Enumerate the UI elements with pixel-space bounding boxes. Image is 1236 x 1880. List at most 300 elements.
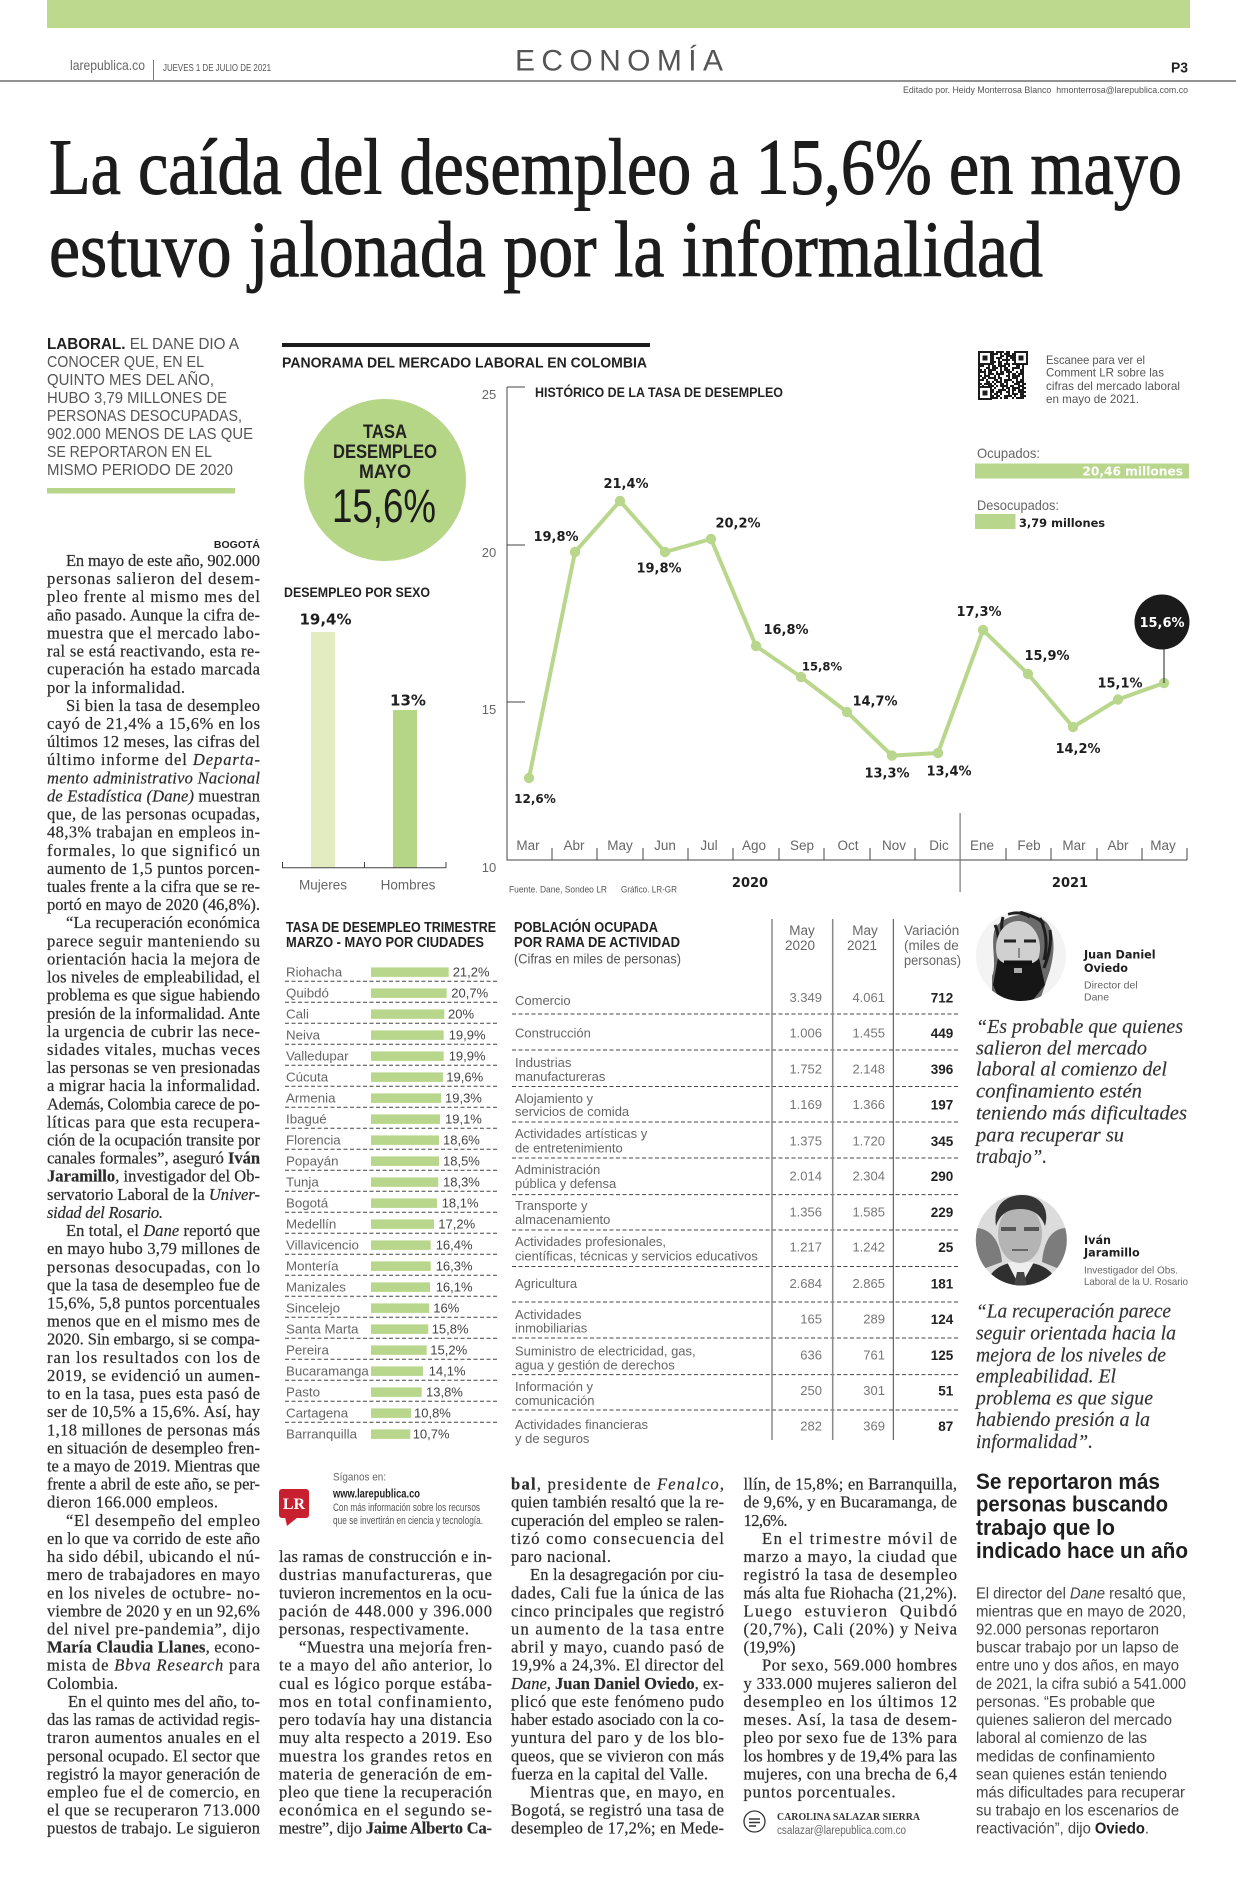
article column 1: En total, el Dane reportó que xyxy=(66,1221,260,1240)
city names: Neiva xyxy=(286,1027,321,1042)
chart heading xyxy=(286,920,496,951)
may 2021 values: 4.061 xyxy=(852,990,885,1005)
deck: intro summary: PERSONAS DESOCUPADAS, xyxy=(47,408,242,425)
article column 1: en mayo hubo 3,79 millones de xyxy=(47,1239,260,1258)
QR caption: cifras del mercado laboral xyxy=(1046,379,1180,393)
variation values: 197 xyxy=(931,1098,953,1113)
month labels: Feb xyxy=(1017,838,1041,853)
article column 1: Si bien la tasa de desempleo xyxy=(66,696,260,715)
article column 2: pleo que tiene la recuperación xyxy=(279,1782,492,1802)
article column 4: y 333.000 mujeres salieron del xyxy=(744,1674,957,1693)
article column 2: te a mayo del año anterior, lo xyxy=(279,1656,492,1675)
city values: 15,2% xyxy=(430,1342,468,1358)
article column 1: sidades vitales, muchas veces xyxy=(47,1040,260,1059)
variation values: 290 xyxy=(931,1169,953,1184)
article column 3: quien también resaltó que la re- xyxy=(511,1493,724,1512)
article column 5: quienes salieron del mercado xyxy=(976,1712,1172,1729)
article column 4: (20,7%), Cali (20%) y Neiva xyxy=(744,1620,958,1638)
article column 1: te a mayo de 2019. Mientras que xyxy=(47,1456,260,1476)
data labels: 13,3% xyxy=(864,766,910,782)
may 2021 values: 761 xyxy=(863,1348,885,1362)
table heading: POBLACIÓN OCUPADA xyxy=(514,918,658,936)
row names: de entretenimiento xyxy=(515,1140,623,1156)
deck: intro summary: CONOCER QUE, EN EL xyxy=(47,354,204,371)
subheading: se reportaron más personas: Se reportaron más xyxy=(976,1469,1160,1494)
row names: Agricultura xyxy=(515,1276,578,1291)
city values: 16% xyxy=(433,1300,460,1316)
article column 3: tizó como consecuencia del xyxy=(511,1529,724,1548)
QR caption: Comment LR sobre las xyxy=(1046,366,1164,380)
quote: Oviedo: “Es probable que quienes xyxy=(976,1016,1183,1038)
variation values: 229 xyxy=(931,1205,953,1220)
article column 1: últimos 12 meses, las cifras del xyxy=(47,732,260,751)
headline xyxy=(49,124,1182,294)
article column 1: “El desempeño del empleo xyxy=(66,1511,260,1530)
article column 1: personas desocupadas, con lo xyxy=(47,1257,260,1276)
y axis: 15 xyxy=(482,702,496,717)
city values: 21,2% xyxy=(453,964,490,980)
may 2020 values: 282 xyxy=(800,1418,822,1433)
masthead: P3 xyxy=(1171,60,1188,77)
article column 1: canales formales”, aseguró Iván xyxy=(47,1149,260,1168)
month labels: Mar xyxy=(516,838,540,853)
quote: Oviedo: teniendo más dificultades xyxy=(976,1102,1187,1124)
may 2021 values: 2.148 xyxy=(852,1062,885,1076)
row names: inmobiliarias xyxy=(515,1320,588,1336)
byline: CAROLINA SALAZAR SIERRA xyxy=(777,1811,920,1823)
data labels: 19,8% xyxy=(636,562,682,576)
may 2020 values: 1.006 xyxy=(789,1026,822,1040)
article column 1: formales, lo que significó un xyxy=(47,841,260,860)
chart heading: TASA DE DESEMPLEO TRIMESTRE xyxy=(286,920,496,936)
article column 3: 19,9% a 24,3%. El director del xyxy=(511,1656,724,1675)
callout: latest value 15,6% xyxy=(1134,594,1190,683)
portrait: Iván Jaramillo xyxy=(975,1194,1067,1290)
article column 3: desempleo de 17,2%; en Mede- xyxy=(511,1819,724,1838)
may 2021 values: 2.865 xyxy=(852,1276,885,1291)
subheading: se reportaron más personas: personas buscando xyxy=(976,1492,1168,1516)
bars xyxy=(371,967,449,1439)
y axis: 25 xyxy=(482,387,496,402)
y axis xyxy=(482,387,1187,892)
bar chart: desempleo por sexo xyxy=(282,585,446,892)
city values: 18,1% xyxy=(442,1196,479,1210)
row names: Información y xyxy=(515,1379,594,1394)
city names: Popayán xyxy=(286,1153,338,1168)
byline: csalazar@larepublica.com.co xyxy=(777,1825,906,1837)
may 2021 values: 301 xyxy=(863,1383,885,1398)
quote: Jaramillo: “La recuperación parece xyxy=(976,1301,1171,1323)
data labels: 17,3% xyxy=(956,605,1002,620)
may 2020 values: 1.217 xyxy=(789,1240,822,1254)
article column 1: las personas se ven presionadas xyxy=(47,1058,260,1077)
table heading xyxy=(514,918,681,966)
person caption: Jaramillo: Laboral de la U. Rosario xyxy=(1084,1276,1188,1288)
article column 1: servatorio Laboral de la Univer- xyxy=(47,1185,260,1204)
variation values: 396 xyxy=(931,1062,954,1077)
article column 3: cuperación del empleo se ralen- xyxy=(511,1511,724,1530)
column headers: Variación xyxy=(904,923,959,938)
article column 5: entre uno y dos años, en mayo xyxy=(976,1658,1179,1675)
quote: Jaramillo: mejora de los niveles de xyxy=(976,1344,1166,1366)
promo: síganos en larepublica.co: www.larepublica.co xyxy=(332,1486,420,1500)
variation values xyxy=(931,991,954,1434)
article column 5: reactivación”, dijo Oviedo. xyxy=(976,1821,1149,1838)
article column 4: 12,6%. xyxy=(744,1511,788,1530)
article column 1: ral se está reactivando, esta re- xyxy=(47,642,260,661)
article column 1: menos que en el mismo mes de xyxy=(47,1312,260,1331)
month labels: Jul xyxy=(700,838,718,853)
panel: panorama del mercado laboral xyxy=(282,343,1190,896)
article column 1: Colombia. xyxy=(47,1674,118,1693)
data labels: 15,9% xyxy=(1024,649,1070,664)
row names: Actividades financieras xyxy=(515,1417,648,1432)
row names: Actividades artísticas y xyxy=(515,1126,648,1141)
article column 4: mujeres, con una brecha de 6,4 xyxy=(744,1764,957,1783)
article column 1: muestra que el mercado labo- xyxy=(47,623,260,642)
article column 1: sidad del Rosario. xyxy=(47,1203,163,1222)
article column 1: 48,3% trabajan en empleos in- xyxy=(47,823,260,842)
city names: Cartagena xyxy=(286,1405,349,1420)
month labels xyxy=(516,838,1176,853)
article column 1: pleo frente al mismo mes del xyxy=(47,587,260,606)
article column 1: ción de la ocupación transite por xyxy=(47,1130,260,1150)
article column 1: cayó de 21,4% a 15,6% en los xyxy=(47,714,260,733)
article column 3: un aumento de la tasa entre xyxy=(511,1620,724,1638)
article column 1: la urgencia de cubrir las nece- xyxy=(47,1022,260,1041)
article column 1: En mayo de este año, 902.000 xyxy=(66,551,260,570)
quote: Oviedo: laboral al comienzo del xyxy=(976,1058,1167,1080)
variation values: 51 xyxy=(938,1384,954,1399)
article column 1: en situación de desempleo fren- xyxy=(47,1438,260,1457)
city names: Pereira xyxy=(286,1342,329,1357)
dateline: BOGOTÁ xyxy=(214,538,260,551)
person caption: Oviedo xyxy=(1083,948,1156,1004)
row names: científicas, técnicas y servicios educativos xyxy=(515,1248,758,1264)
bar chart: desempleo por sexo: 19,4% xyxy=(299,610,352,628)
article column 1: dieron 166.000 empleos. xyxy=(47,1493,218,1512)
city values: 16,3% xyxy=(436,1258,473,1274)
column headers: (miles de xyxy=(904,938,959,953)
article column 4: registró la tasa de desempleo xyxy=(744,1565,957,1584)
article column 4: puntos porcentuales. xyxy=(744,1782,896,1802)
stat: desocupados xyxy=(975,497,1105,530)
city names: Florencia xyxy=(286,1132,341,1147)
deck: intro summary: HUBO 3,79 MILLONES DE xyxy=(47,390,227,407)
data labels: 20,2% xyxy=(715,516,761,532)
bar chart: desempleo por sexo: Hombres xyxy=(381,878,436,892)
article column 1: Jaramillo, investigador del Ob- xyxy=(47,1167,260,1186)
may 2020 values: 250 xyxy=(800,1383,822,1398)
table heading: (Cifras en miles de personas) xyxy=(514,952,681,966)
line chart: histórico de la tasa de desempleo xyxy=(482,385,1190,896)
article column 1: registró la mayor generación de xyxy=(47,1764,260,1783)
data labels: 14,2% xyxy=(1055,742,1101,757)
bar chart: desempleo por sexo: 13% xyxy=(390,692,426,710)
city names: Medellín xyxy=(286,1216,336,1231)
city names: Barranquilla xyxy=(286,1426,358,1441)
QR caption xyxy=(1046,353,1180,406)
top green band xyxy=(47,0,1190,28)
column headers: May xyxy=(789,923,815,938)
article column 5: El director del Dane resaltó que, xyxy=(976,1585,1186,1602)
year labels: 2020 xyxy=(732,876,768,891)
city names: Valledupar xyxy=(286,1048,349,1063)
quote: Jaramillo: seguir orientada hacia la xyxy=(976,1322,1176,1344)
article column 2: pero todavía hay una distancia xyxy=(279,1710,493,1729)
article column 4: los hombres y de 19,4% para las xyxy=(744,1746,957,1765)
panel title: PANORAMA DEL MERCADO LABORAL EN COLOMBIA xyxy=(282,356,648,372)
article column 3: Mientras que, en mayo, en xyxy=(530,1782,724,1802)
may 2021 values: 1.455 xyxy=(852,1026,885,1040)
article column 1: portó en mayo de 2020 (46,8%). xyxy=(47,895,260,914)
article column 1: en lo que va corrido de este año xyxy=(47,1529,260,1548)
subheading: se reportaron más personas xyxy=(976,1469,1188,1563)
article column 1: de Estadística (Dane) muestran xyxy=(47,786,260,805)
article column 4: pleo por sexo fue de 13% para xyxy=(744,1728,958,1747)
article column 1: viembre de 2020 y en un 92,6% xyxy=(47,1601,260,1620)
article column 4: (19,9%) xyxy=(744,1638,796,1657)
article column 5: 92.000 personas reportaron xyxy=(976,1622,1159,1638)
data line xyxy=(524,496,1169,783)
article column 1: empleo fue el de comercio, en xyxy=(47,1782,260,1802)
data labels xyxy=(514,477,1143,806)
subheading: se reportaron más personas: trabajo que lo xyxy=(976,1515,1115,1540)
may 2021 values: 1.242 xyxy=(852,1240,885,1254)
row names: Actividades xyxy=(515,1307,582,1322)
masthead: Editado por. Heidy Monterrosa Blanco hmonterrosa@larepublica.com.co xyxy=(903,85,1188,96)
article column 3: En la desagregación por ciu- xyxy=(530,1565,724,1584)
article column 1: das las ramas de actividad regis- xyxy=(47,1710,260,1729)
variation values: 25 xyxy=(938,1240,954,1255)
article column 2: materia de generación de em- xyxy=(279,1764,492,1783)
article column 1: por la informalidad. xyxy=(47,678,185,697)
row names: manufactureras xyxy=(515,1069,606,1084)
promo: síganos en larepublica.co: Síganos en: xyxy=(333,1472,386,1484)
row names: y de seguros xyxy=(515,1431,590,1446)
may 2021 values: 1.366 xyxy=(852,1097,885,1112)
article column 1: tuales frente a la cifra que se re- xyxy=(47,877,260,896)
article column 1: parece seguir manteniendo su xyxy=(47,931,260,950)
masthead xyxy=(0,45,1236,96)
month labels: Abr xyxy=(1107,838,1129,853)
person caption: Jaramillo: Iván xyxy=(1084,1234,1111,1247)
row names xyxy=(515,993,758,1446)
article column 4 xyxy=(744,1475,958,1802)
city values: 18,5% xyxy=(443,1154,480,1168)
chart heading: MARZO - MAYO POR CIUDADES xyxy=(286,935,484,951)
may 2021 values: 369 xyxy=(863,1418,885,1433)
row names: almacenamiento xyxy=(515,1212,610,1227)
bar chart: desempleo por sexo: Mujeres xyxy=(299,878,347,892)
city names: Tunja xyxy=(286,1174,319,1189)
city values: 14,1% xyxy=(429,1364,466,1378)
variation values: 712 xyxy=(931,991,953,1006)
article column 3: yuntura del paro y de los blo- xyxy=(511,1728,724,1747)
article column 4: Por sexo, 569.000 hombres xyxy=(762,1656,957,1675)
article column 1: puestos de trabajo. Le siguieron xyxy=(47,1819,260,1838)
article column 1: to en la tasa, pues esta pasó de xyxy=(47,1384,260,1403)
variation values: 125 xyxy=(931,1348,954,1363)
row names: comunicación xyxy=(515,1393,594,1408)
person caption: Oviedo: Dane xyxy=(1084,992,1109,1004)
promo: síganos en larepublica.co: que se invertirán en ciencia y tecnología. xyxy=(333,1515,483,1527)
person caption: Jaramillo: Investigador del Obs. xyxy=(1084,1264,1178,1276)
deck: intro summary: LABORAL. EL DANE DIO A xyxy=(47,336,240,353)
quote: Jaramillo: empleabilidad. El xyxy=(976,1366,1116,1388)
column headers: 2020 xyxy=(785,938,815,953)
article column 4: más alta fue Riohacha (21,2%). xyxy=(744,1583,957,1602)
article column 1 xyxy=(47,551,261,1838)
article column 4: Luego estuvieron Quibdó xyxy=(744,1601,957,1620)
article column 2: las ramas de construcción e in- xyxy=(279,1547,492,1566)
article column 1: personal ocupado. El sector que xyxy=(47,1746,260,1765)
article column 2: dustrias manufactureras, que xyxy=(279,1565,492,1584)
row names: agua y gestión de derechos xyxy=(515,1358,675,1372)
column headers xyxy=(785,923,961,968)
month labels: Abr xyxy=(563,838,585,853)
article column 5: su trabajo en los escenarios de xyxy=(976,1803,1179,1820)
data labels: 14,7% xyxy=(852,694,898,710)
article column 2: personas, respectivamente. xyxy=(279,1620,469,1638)
quote: Oviedo: trabajo”. xyxy=(976,1146,1047,1168)
icon: QR code xyxy=(978,352,1028,399)
article column 1: frente a abril de este año, se per- xyxy=(47,1475,260,1494)
article column 1: mista de Bbva Research para xyxy=(47,1656,261,1675)
column headers: personas) xyxy=(904,953,961,968)
article column 5: laboral al comienzo de las xyxy=(976,1730,1147,1747)
article column 3: abril y mayo, cuando pasó de xyxy=(511,1638,724,1657)
article column 4: llín, de 15,8%; en Barranquilla, xyxy=(744,1475,957,1494)
article column 1: “La recuperación económica xyxy=(66,913,261,932)
table: población ocupada por rama de actividad xyxy=(512,918,961,1446)
QR caption: en mayo de 2021. xyxy=(1046,392,1139,406)
quote: Oviedo: confinamiento estén xyxy=(976,1081,1142,1103)
article column 4: de 9,6%, y en Bucaramanga, de xyxy=(744,1493,957,1512)
article column 3: haber estado asociado con la co- xyxy=(511,1710,724,1729)
city values: 18,3% xyxy=(443,1174,480,1190)
city names: Montería xyxy=(286,1258,339,1273)
article column 1: ran los resultados con los de xyxy=(47,1348,260,1367)
article column 1: personas salieron del desem- xyxy=(47,569,260,588)
city values: 10,7% xyxy=(413,1426,450,1442)
article column 1: que, de las personas ocupadas, xyxy=(47,804,260,824)
city names: Bucaramanga xyxy=(286,1363,369,1378)
month labels: Oct xyxy=(837,838,859,853)
article column 2: mos en total confinamiento, xyxy=(279,1692,492,1711)
row names: Actividades profesionales, xyxy=(515,1234,666,1249)
callout: tasa desempleo mayo circle xyxy=(304,399,466,561)
article column 3: paro nacional. xyxy=(511,1547,611,1566)
month labels: Ene xyxy=(970,838,994,853)
article column 3: cinco principales que registró xyxy=(511,1601,724,1620)
city names: Ibagué xyxy=(286,1111,327,1126)
city values xyxy=(413,964,490,1442)
city names: Sincelejo xyxy=(286,1300,340,1315)
source note: Gráfico. LR-GR xyxy=(621,884,677,896)
city values: 16,1% xyxy=(436,1280,473,1294)
article column 1: 15,6%, 5,8 puntos porcentuales xyxy=(47,1294,260,1312)
variation values: 449 xyxy=(931,1026,953,1041)
month labels: May xyxy=(1150,838,1176,853)
headline: estuvo jalonada por la informalidad xyxy=(49,207,1043,294)
month labels: Mar xyxy=(1062,838,1086,853)
article column 1: a migrar hacia la informalidad. xyxy=(47,1076,260,1095)
article column 2: cual es lógico porque estába- xyxy=(279,1674,492,1693)
y axis: 10 xyxy=(482,860,496,875)
article column 5: medidas de confinamiento xyxy=(976,1748,1155,1765)
article column 1: en los niveles de octubre- no- xyxy=(47,1583,260,1602)
variation values: 124 xyxy=(931,1312,954,1327)
city values: 18,6% xyxy=(443,1132,480,1148)
city values: 20,7% xyxy=(451,986,489,1000)
may 2020 values: 165 xyxy=(800,1312,822,1326)
month labels: Ago xyxy=(742,838,766,853)
may 2021 values: 1.720 xyxy=(852,1134,885,1148)
may 2021 values: 289 xyxy=(863,1312,885,1326)
bar chart: desempleo por sexo: DESEMPLEO POR SEXO xyxy=(284,585,430,600)
source note: Fuente. Dane, Sondeo LR xyxy=(509,884,607,896)
person caption: Oviedo: Oviedo xyxy=(1084,962,1128,975)
article column 1: año pasado. Aunque la cifra de- xyxy=(47,605,260,624)
city names: Pasto xyxy=(286,1384,320,1399)
quote: Oviedo: salieron del mercado xyxy=(976,1038,1147,1060)
quote: Jaramillo: habiendo presión a la xyxy=(976,1409,1150,1431)
may 2021 values xyxy=(852,990,885,1433)
row names: Construcción xyxy=(515,1026,591,1040)
variation values: 181 xyxy=(931,1277,954,1292)
icon: comment bubble xyxy=(744,1811,765,1832)
article column 1: problema es que sigue habiendo xyxy=(47,986,260,1005)
stat: desocupados: Desocupados: xyxy=(977,497,1059,513)
city values: 13,8% xyxy=(426,1384,463,1400)
article column 2: económica en el segundo se- xyxy=(279,1801,492,1820)
article column 1: traron aumentos anuales en el xyxy=(47,1728,260,1747)
y axis: 20 xyxy=(482,545,496,560)
promo: síganos en larepublica.co xyxy=(279,1472,483,1527)
article column 4: marzo a mayo, la ciudad que xyxy=(744,1547,957,1566)
may 2020 values: 1.375 xyxy=(789,1134,822,1148)
article column 3 xyxy=(510,1475,724,1838)
article column 1: los niveles de empleabilidad, el xyxy=(47,968,260,986)
article column 1: En el quinto mes del año, to- xyxy=(68,1692,260,1711)
may 2020 values: 636 xyxy=(800,1348,822,1362)
city values: 17,2% xyxy=(438,1216,476,1232)
callout: tasa desempleo mayo circle: MAYO xyxy=(359,462,411,483)
article column 1: orientación hacia la mejora de xyxy=(47,949,260,968)
article column 1: del nivel pre-pandemia”, dijo xyxy=(47,1620,260,1638)
promo: síganos en larepublica.co: Con más información sobre los recursos xyxy=(333,1502,480,1514)
data labels: 16,8% xyxy=(763,623,809,638)
masthead: larepublica.co xyxy=(70,57,145,73)
year labels xyxy=(732,876,1088,891)
article column 4: desempleo en los últimos 12 xyxy=(744,1692,957,1711)
article column 1: último informe del Departa- xyxy=(47,750,260,769)
person caption: Jaramillo: Jaramillo xyxy=(1083,1247,1140,1260)
city names: Cali xyxy=(286,1006,309,1021)
article column 3: plicó que este fenómeno pudo xyxy=(511,1692,724,1711)
article column 3: bal, presidente de Fenalco, xyxy=(511,1475,724,1494)
city names: Quibdó xyxy=(286,985,329,1000)
article column 3: Dane, Juan Daniel Oviedo, ex- xyxy=(510,1674,724,1693)
article column 3: dades, Cali fue la única de las xyxy=(511,1583,724,1602)
article column 2: mestre”, dijo Jaime Alberto Ca- xyxy=(279,1819,492,1838)
city values: 15,8% xyxy=(432,1322,469,1336)
may 2020 values: 3.349 xyxy=(789,990,822,1005)
person caption: Jaramillo xyxy=(1083,1234,1188,1288)
article column 3: fuerza en la capital del Valle. xyxy=(511,1764,708,1783)
row names: Industrias xyxy=(515,1055,572,1070)
